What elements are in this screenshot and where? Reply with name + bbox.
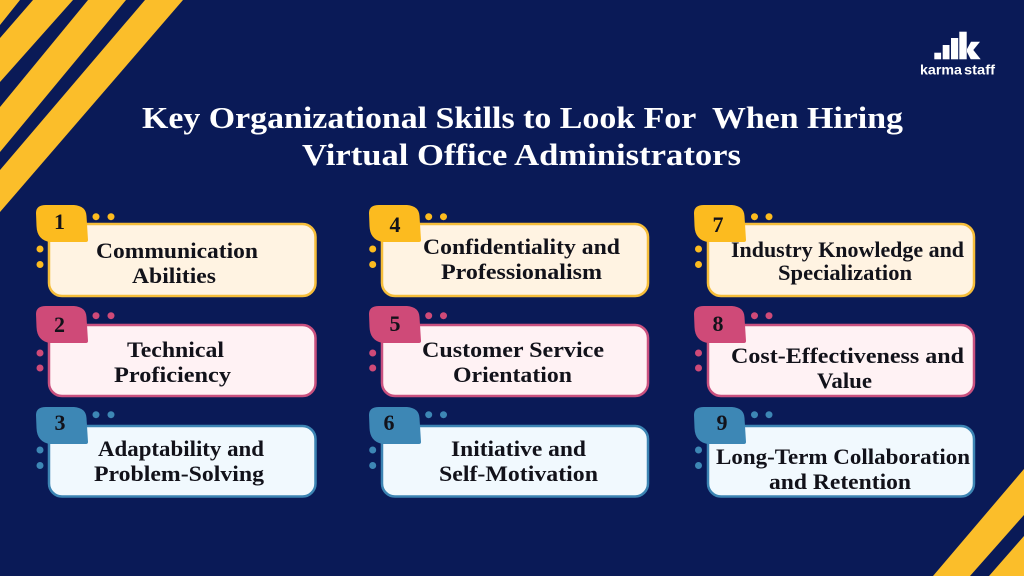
logo wordmark [920,62,996,77]
card 4: Confidentiality and Professionalism [369,205,648,296]
card 9: Long-Term Collaboration and Retention [694,407,974,496]
card 4: Confidentiality and Professionalism: Professionalism [441,259,602,284]
card 6: Initiative and Self-Motivation [369,407,648,496]
card 7: Industry Knowledge and Specialization: Specialization [778,260,912,285]
card 8: Cost-Effectiveness and Value: Value [817,368,872,393]
card 2: Technical Proficiency: Technical [127,337,224,362]
logo wordmark: karma [920,62,963,77]
icon: bars and k [934,32,981,59]
title [142,101,903,172]
card 8: Cost-Effectiveness and Value [694,306,974,396]
top-left diagonal stripes [0,0,183,212]
card 8: Cost-Effectiveness and Value: Cost-Effectiveness and [731,343,965,368]
card 5: Customer Service Orientation: 5 [390,311,400,336]
card 1: Communication Abilities: Communication [96,238,258,263]
logo wordmark: staff [964,62,996,77]
bottom-right diagonal stripes [933,469,1024,576]
card 5: Customer Service Orientation [369,306,648,396]
logo: karma staff [920,32,996,77]
card 1: Communication Abilities: 1 [54,209,65,234]
card 7: Industry Knowledge and Specialization [694,205,974,296]
card 7: Industry Knowledge and Specialization: Industry Knowledge and [731,237,964,262]
card 9: Long-Term Collaboration and Retention: and Retention [769,469,912,494]
card 5: Customer Service Orientation: Orientation [453,362,573,387]
card 3: Adaptability and Problem-Solving: Adaptability and [98,436,264,461]
card 2: Technical Proficiency [36,306,316,396]
title: Key Organizational Skills to Look For When Hiring [142,101,903,135]
card 6: Initiative and Self-Motivation: Self-Motivation [439,461,599,486]
card 1: Communication Abilities: Abilities [132,263,216,288]
card 1: Communication Abilities [36,205,316,296]
card 3: Adaptability and Problem-Solving: Problem-Solving [94,461,265,486]
card 9: Long-Term Collaboration and Retention: Long-Term Collaboration [716,444,970,469]
card 5: Customer Service Orientation: Customer Service [422,337,604,362]
card 4: Confidentiality and Professionalism: 4 [390,212,400,237]
card 2: Technical Proficiency: 2 [54,312,65,337]
card 4: Confidentiality and Professionalism: Confidentiality and [423,234,621,259]
card 2: Technical Proficiency: Proficiency [114,362,232,387]
card 3: Adaptability and Problem-Solving [36,407,316,496]
title: Virtual Office Administrators [302,138,741,172]
card 9: Long-Term Collaboration and Retention: 9 [716,410,728,435]
card 6: Initiative and Self-Motivation: 6 [384,410,394,435]
card 3: Adaptability and Problem-Solving: 3 [54,410,66,435]
card 7: Industry Knowledge and Specialization: 7 [712,212,724,237]
card 8: Cost-Effectiveness and Value: 8 [712,311,724,336]
card 6: Initiative and Self-Motivation: Initiative and [451,436,586,461]
